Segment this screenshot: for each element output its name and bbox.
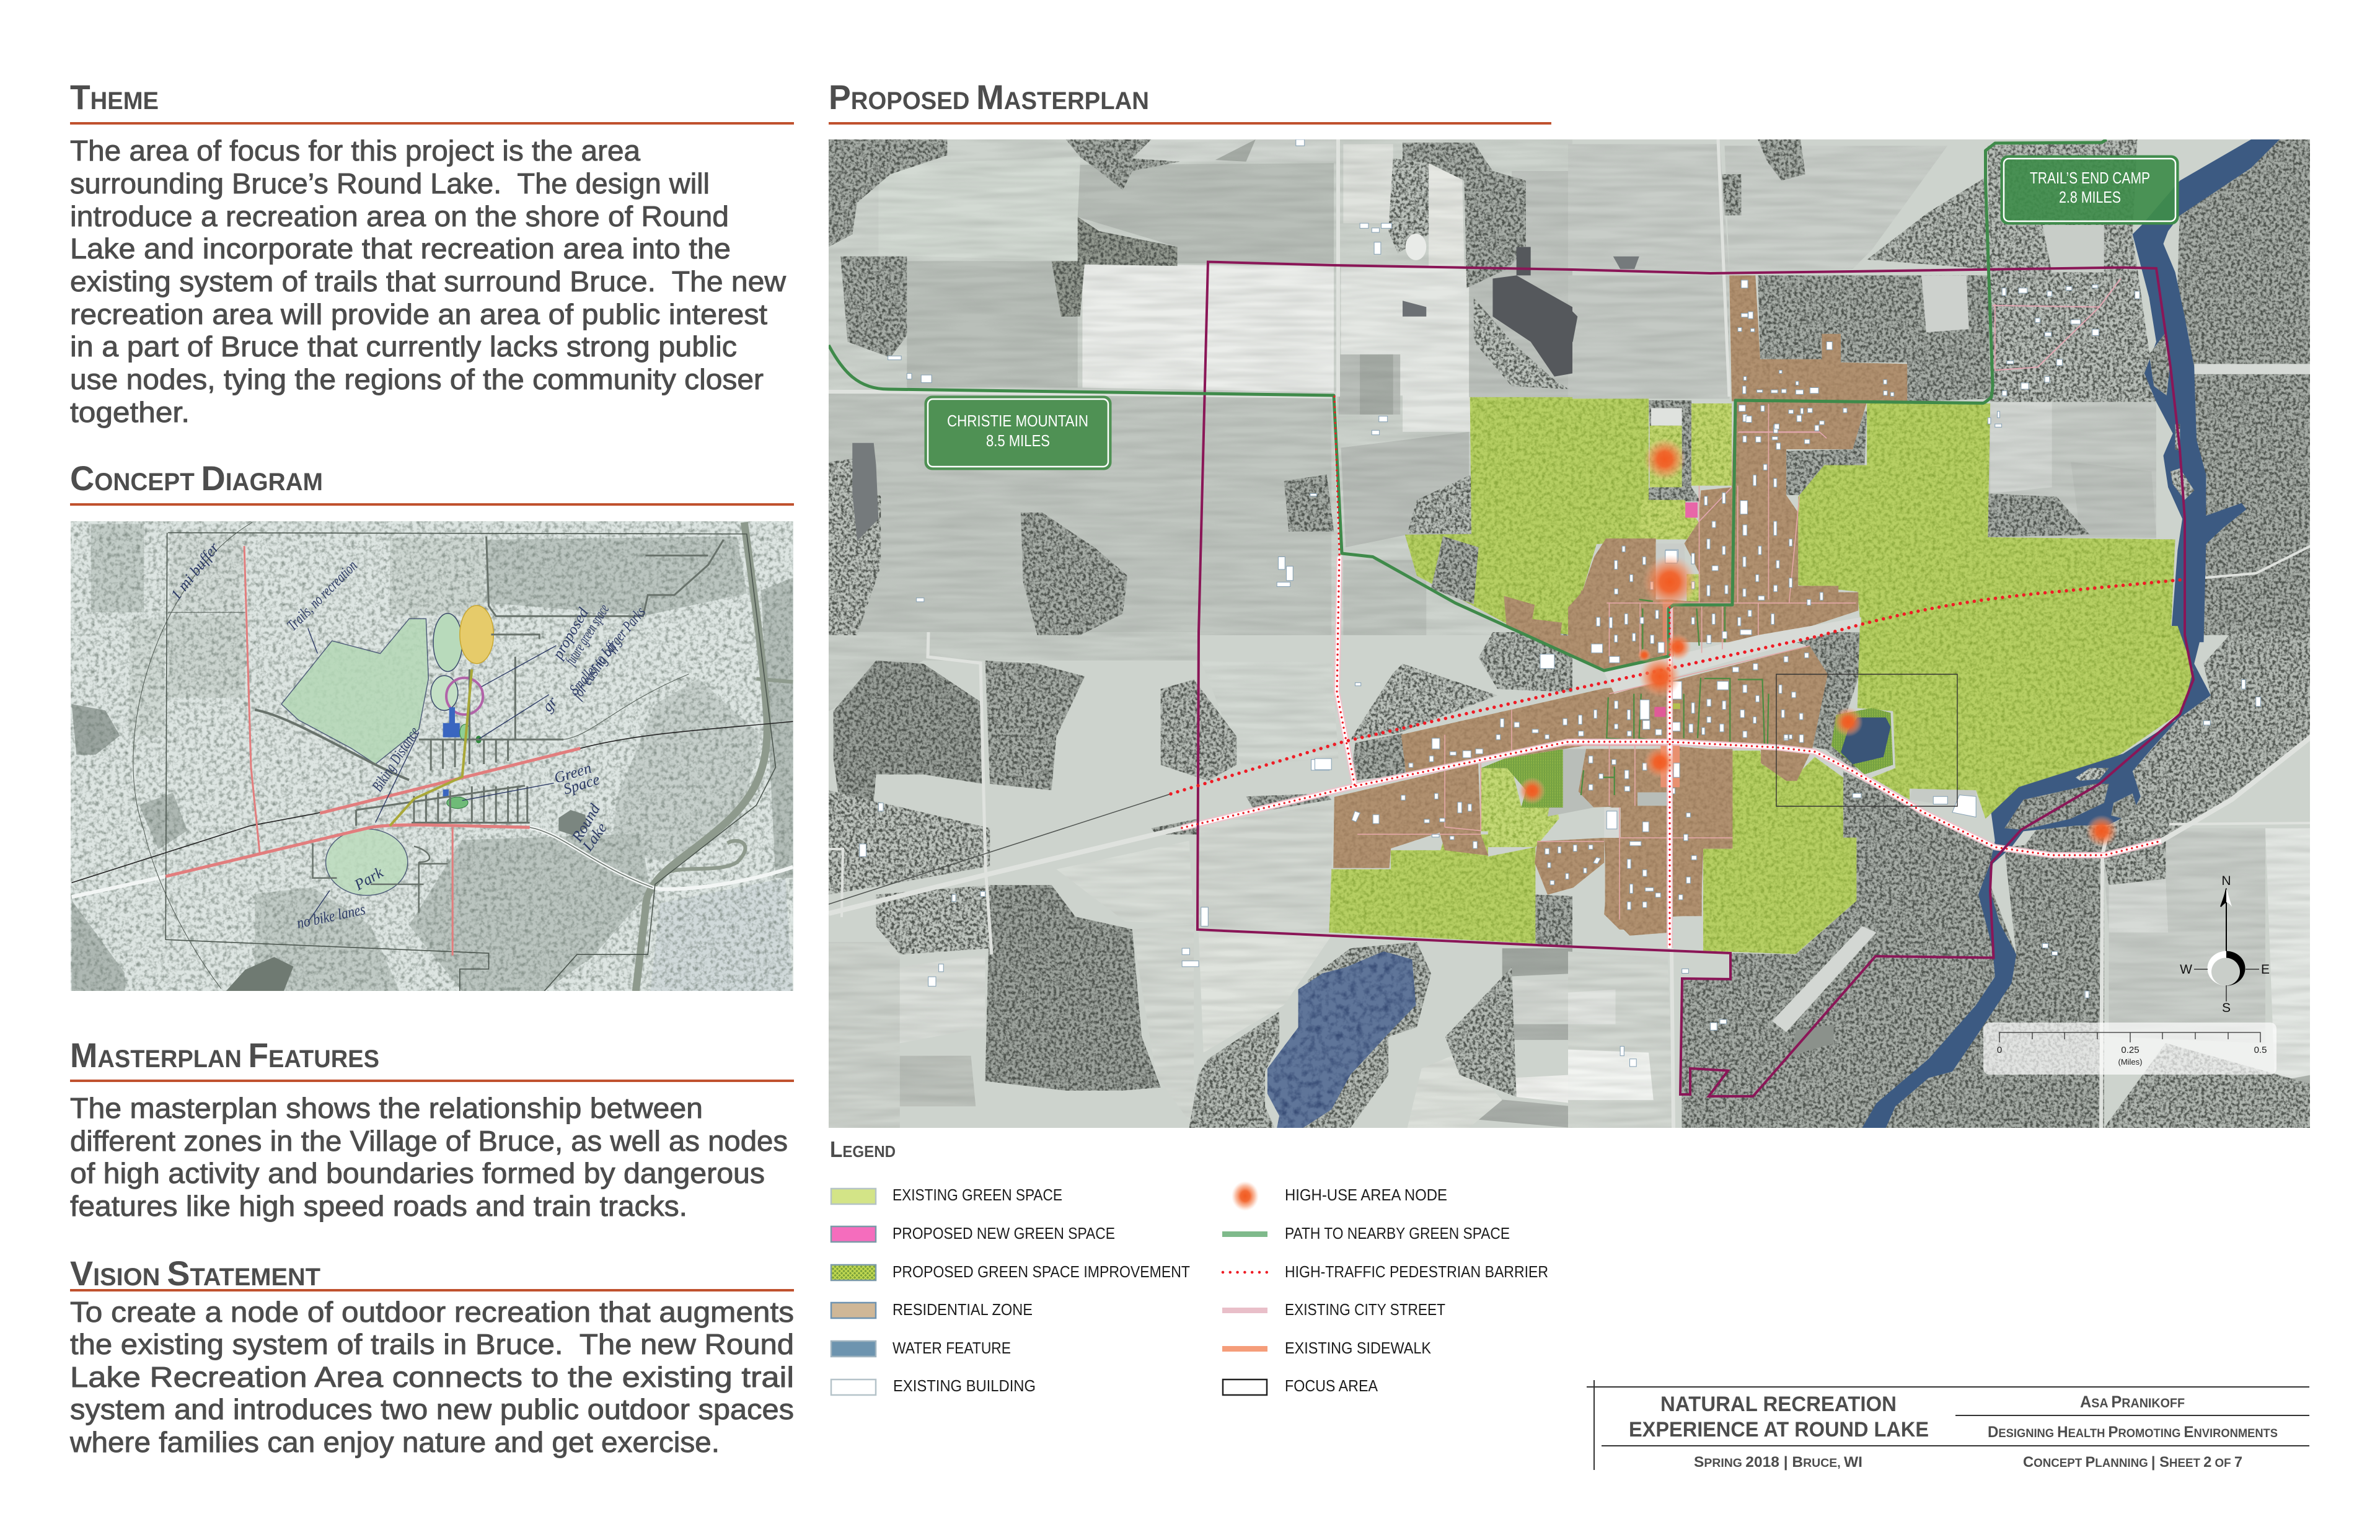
- concept diagram: boundary, buffer and rail lines: [72, 522, 793, 991]
- project title: EXPERIENCE AT ROUND LAKE: [1629, 1418, 1929, 1441]
- text block: theme: existing system of trails that surround Bruce. The new: [70, 265, 787, 297]
- text block: theme: Lake and incorporate that recreation area into the: [70, 232, 731, 265]
- concept diagram: red barrier sketch lines: [165, 546, 580, 956]
- text block: theme: [70, 134, 787, 428]
- text block: theme: The area of focus for this project is the area: [70, 134, 640, 167]
- legend: existing green space: [831, 1186, 1062, 1204]
- concept diagram: roads and street grid: [72, 537, 793, 913]
- legend: existing green space: EXISTING GREEN SPACE: [892, 1186, 1062, 1204]
- legend: proposed green space improvement: PROPOSED GREEN SPACE IMPROVEMENT: [892, 1262, 1190, 1281]
- legend: path to nearby green space: PATH TO NEARBY GREEN SPACE: [1285, 1224, 1510, 1243]
- text block: masterplan features: different zones in the Village of Bruce, as well as nodes: [70, 1125, 788, 1157]
- map: proposed new green spaces and sidewalk zone: [1654, 503, 1698, 787]
- concept diagram: handwritten notes: future green space: [562, 602, 612, 668]
- legend: water feature: WATER FEATURE: [892, 1339, 1011, 1357]
- map: scale bar: 0.5: [2254, 1045, 2267, 1055]
- text block: masterplan features: The masterplan shows the relationship between: [70, 1092, 703, 1124]
- sheet information: CONCEPT PLANNING | SHEET 2 OF 7: [2023, 1454, 2242, 1471]
- map: project boundary: [1197, 262, 2193, 1096]
- map: pedestrian barrier dotted lines: [1171, 397, 2185, 948]
- legend: residential zone: [831, 1300, 1033, 1319]
- text block: vision statement: system and introduces two new public outdoor spaces: [70, 1393, 794, 1425]
- map: high-use area nodes: [1518, 438, 2118, 847]
- concept diagram: handwritten notes: Biking Distance: [369, 724, 423, 794]
- legend: existing building: [831, 1376, 1036, 1395]
- legend: existing building: EXISTING BUILDING: [893, 1376, 1036, 1395]
- text block: masterplan features: features like high speed roads and train tracks.: [70, 1190, 687, 1222]
- concept diagram: handwritten notes: gr: [539, 693, 561, 715]
- map: high-traffic road pink casings: [1182, 557, 2161, 948]
- panel: proposed masterplan map: [829, 139, 2312, 1128]
- map: city streets: [1357, 278, 2121, 920]
- concept diagram: handwritten notes: no bike lanes: [296, 901, 367, 932]
- text block: theme: surrounding Bruce’s Round Lake. The design will: [70, 167, 710, 200]
- map: focus area rectangle: [1776, 674, 1957, 806]
- map label: Christie Mountain: [926, 397, 1110, 469]
- map: paths to nearby green space: [829, 139, 2107, 671]
- text block: vision statement: the existing system of trails in Bruce. The new Round: [70, 1328, 794, 1360]
- legend: existing sidewalk: EXISTING SIDEWALK: [1285, 1339, 1432, 1357]
- map label: Trail's End Camp: 2.8 MILES: [2059, 188, 2121, 206]
- concept diagram: handwritten notes: Round: [568, 801, 604, 845]
- concept diagram: handwritten notes: for easing off: [569, 638, 621, 702]
- map: north arrow compass: [2180, 874, 2270, 1015]
- map: existing green space zones: [1329, 397, 2193, 954]
- heading: proposed masterplan: [829, 77, 1551, 125]
- project title: NATURAL RECREATION: [1660, 1393, 1897, 1416]
- text block: theme: together.: [70, 396, 190, 428]
- map: green block outlines: [1581, 599, 1768, 795]
- map: north arrow compass: N: [2221, 874, 2231, 888]
- map: school and lot gaps: [1548, 408, 1861, 838]
- heading: concept diagram: CONCEPT DIAGRAM: [70, 459, 323, 498]
- map: clearings and cut strips in forest: [1772, 225, 2312, 1056]
- heading: theme: [70, 77, 794, 125]
- concept diagram: handwritten notes: Park: [351, 864, 387, 894]
- concept diagram: handwritten notes: Space: [562, 771, 602, 798]
- text block: vision statement: [69, 1296, 794, 1458]
- concept diagram: textured land: [71, 521, 793, 991]
- heading: vision statement: VISION STATEMENT: [70, 1254, 320, 1293]
- legend: existing sidewalk: [1222, 1339, 1432, 1357]
- legend: high-use area node: HIGH-USE AREA NODE: [1285, 1186, 1447, 1204]
- text block: vision statement: where families can enjoy nature and get exercise.: [69, 1426, 720, 1458]
- heading: masterplan features: [70, 1036, 794, 1082]
- heading: proposed masterplan: PROPOSED MASTERPLAN: [829, 77, 1149, 117]
- heading: concept diagram: [70, 459, 794, 506]
- map label: Christie Mountain: 8.5 MILES: [986, 431, 1050, 450]
- map: existing buildings: [1311, 406, 1823, 910]
- map: large lake: [1267, 951, 1416, 1128]
- legend: high-use area node: [1232, 1181, 1447, 1211]
- map label: Christie Mountain: CHRISTIE MOUNTAIN: [947, 411, 1088, 430]
- legend title: LEGEND: [830, 1137, 896, 1162]
- concept diagram: handwritten notes: Lake: [579, 820, 610, 855]
- legend: existing city street: [1222, 1300, 1445, 1319]
- course name: DESIGNING HEALTH PROMOTING ENVIRONMENTS: [1988, 1423, 2278, 1441]
- map: scale bar: 0: [1997, 1045, 2002, 1055]
- legend: focus area: FOCUS AREA: [1285, 1376, 1378, 1395]
- legend: high-traffic pedestrian barrier: HIGH-TRAFFIC PEDESTRIAN BARRIER: [1285, 1262, 1548, 1281]
- text block: theme: in a part of Bruce that currently lacks strong public: [70, 330, 737, 363]
- map: river islands: [2004, 332, 2299, 830]
- map: scale bar: 0.25: [2121, 1045, 2140, 1055]
- legend: proposed new green space: PROPOSED NEW GREEN SPACE: [892, 1224, 1115, 1243]
- map: north arrow compass: E: [2261, 962, 2270, 977]
- date and location: SPRING 2018 | BRUCE, WI: [1694, 1454, 1862, 1471]
- concept diagram: olive connection sketch: [390, 669, 472, 826]
- heading: vision statement: [70, 1254, 794, 1293]
- concept diagram: hand-annotated map: [71, 521, 793, 991]
- heading: theme: THEME: [70, 77, 159, 117]
- author name: ASA PRANIKOFF: [2080, 1393, 2185, 1411]
- legend: [830, 1137, 1548, 1395]
- concept diagram: handwritten notes: Green: [552, 760, 594, 787]
- concept diagram: handwritten notes: [167, 539, 649, 932]
- legend: residential zone: RESIDENTIAL ZONE: [892, 1300, 1033, 1319]
- text block: theme: recreation area will provide an area of public interest: [70, 298, 767, 330]
- legend: focus area: [1223, 1376, 1378, 1395]
- map: upper residential and outlying buildings: [860, 139, 2260, 1067]
- map: dark ponds and wetlands: [852, 234, 1639, 541]
- concept diagram: annotation leaders: [308, 628, 556, 922]
- map label: Trail's End Camp: TRAIL’S END CAMP: [2030, 169, 2150, 187]
- heading: masterplan features: MASTERPLAN FEATURES: [70, 1036, 379, 1075]
- text block: vision statement: Lake Recreation Area connects to the existing trail: [70, 1361, 794, 1393]
- map: north arrow compass: W: [2180, 962, 2192, 977]
- map: railway line: [829, 794, 1171, 904]
- map: forest gaps inside green zone: [1431, 536, 1478, 604]
- legend: existing city street: EXISTING CITY STREET: [1285, 1300, 1445, 1319]
- concept diagram: sketched green and colored zones: [281, 605, 493, 895]
- map: scale bar: (Miles): [2118, 1057, 2142, 1067]
- map: scale bar: [1983, 1023, 2276, 1075]
- map: river: [1862, 139, 2280, 1128]
- text block: vision statement: To create a node of outdoor recreation that augments: [70, 1296, 794, 1328]
- concept diagram: handwritten notes: Trails, no recreation: [284, 557, 361, 634]
- title block: [1587, 1380, 2309, 1471]
- map: residential zones: [1333, 275, 1907, 936]
- map: north arrow compass: S: [2222, 1001, 2231, 1015]
- concept diagram: river and lakes: [226, 522, 793, 991]
- text block: theme: introduce a recreation area on the shore of Round: [70, 200, 729, 232]
- map: farm fields: [829, 139, 2312, 1128]
- map: aerial forest cover: [829, 139, 2312, 1128]
- text block: theme: use nodes, tying the regions of the community closer: [70, 363, 764, 395]
- concept diagram: handwritten notes: 1 mi buffer: [167, 539, 223, 604]
- text block: masterplan features: [70, 1092, 788, 1222]
- concept diagram: handwritten notes: Smaller to Larger Parks: [566, 604, 649, 698]
- map: round lake pond: [1841, 718, 1890, 764]
- map: proposed green space improvement: [1481, 708, 1893, 807]
- concept diagram: handwritten notes: proposed: [549, 605, 592, 663]
- map label: Trail's End Camp: [2002, 157, 2177, 223]
- legend: water feature: [831, 1339, 1011, 1357]
- text block: masterplan features: of high activity and boundaries formed by dangerous: [70, 1157, 765, 1189]
- project title: [1629, 1393, 1929, 1441]
- map: rural roads: [829, 139, 2312, 1128]
